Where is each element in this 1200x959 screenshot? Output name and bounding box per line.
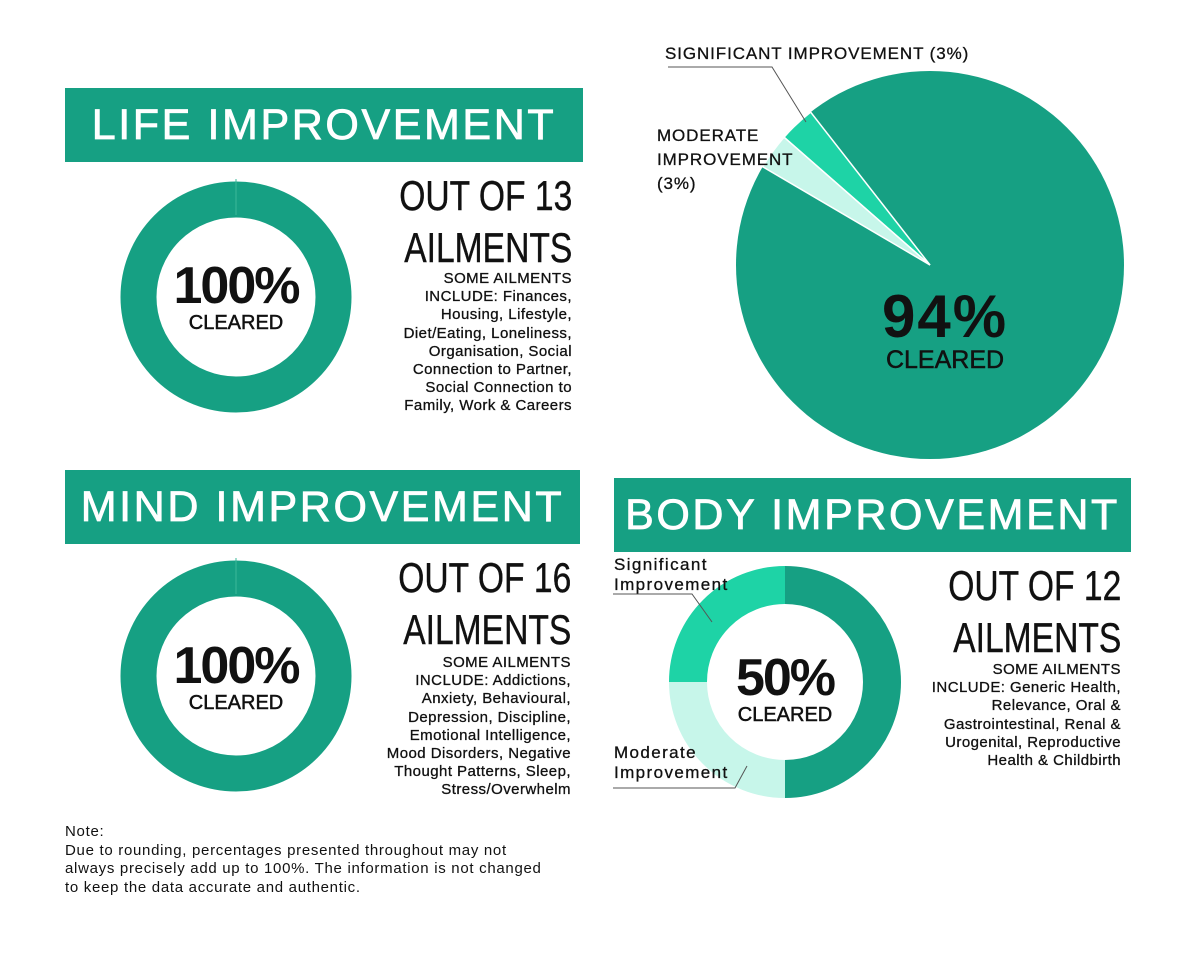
donut label: life: 100% xyxy=(174,257,298,315)
text: life ailments: Diet/Eating, Loneliness, xyxy=(404,325,572,342)
text: life ailments xyxy=(404,270,572,414)
pie label: moderate xyxy=(657,126,793,193)
text: life ailments: Organisation, Social xyxy=(429,343,572,360)
heading: out of 12 ailments: OUT OF 12 xyxy=(948,562,1121,609)
text: body ailments: Urogenital, Reproductive xyxy=(945,734,1121,751)
pie chart: life overall xyxy=(736,71,1124,459)
donut label: mind: CLEARED xyxy=(189,692,283,714)
donut label: mind: 100% xyxy=(174,637,298,695)
text: body ailments xyxy=(932,661,1121,769)
heading: out of 13 ailments xyxy=(399,172,572,271)
note xyxy=(65,823,542,896)
banner: mind improvement: MIND IMPROVEMENT xyxy=(81,483,564,531)
text: body ailments: Gastrointestinal, Renal & xyxy=(944,716,1121,733)
text: life ailments: Social Connection to xyxy=(425,379,572,396)
text: mind ailments: Anxiety, Behavioural, xyxy=(422,690,571,707)
pie center label: 94% cleared: CLEARED xyxy=(886,346,1004,374)
label: significant improvement: Improvement xyxy=(614,575,729,594)
text: life ailments: INCLUDE: Finances, xyxy=(425,288,572,305)
pie label: moderate: IMPROVEMENT xyxy=(657,150,793,169)
pie label: significant: SIGNIFICANT IMPROVEMENT (3%) xyxy=(665,44,969,63)
banner: body improvement xyxy=(614,478,1131,552)
text: mind ailments: Emotional Intelligence, xyxy=(410,727,571,744)
text: mind ailments xyxy=(387,654,571,798)
label: significant improvement: Significant xyxy=(614,555,708,574)
banner: life improvement: LIFE IMPROVEMENT xyxy=(92,101,556,149)
heading: out of 13 ailments: OUT OF 13 xyxy=(399,172,572,219)
text: mind ailments: SOME AILMENTS xyxy=(443,654,571,671)
heading: out of 16 ailments xyxy=(398,554,571,653)
text: life ailments: SOME AILMENTS xyxy=(444,270,572,287)
text: body ailments: Relevance, Oral & xyxy=(992,697,1121,714)
leader lines xyxy=(613,67,806,788)
banner: life improvement xyxy=(65,88,583,162)
text: body ailments: SOME AILMENTS xyxy=(993,661,1121,678)
label: significant improvement xyxy=(614,555,729,594)
text: mind ailments: Stress/Overwhelm xyxy=(441,781,571,798)
note: Due to rounding, percentages presented throughout may not xyxy=(65,842,507,858)
banner: body improvement: BODY IMPROVEMENT xyxy=(625,491,1120,539)
donut: life 100% xyxy=(138,179,334,394)
heading: out of 16 ailments: AILMENTS xyxy=(403,606,571,653)
note: to keep the data accurate and authentic. xyxy=(65,878,361,896)
label: moderate improvement xyxy=(614,743,729,782)
text: mind ailments: Thought Patterns, Sleep, xyxy=(394,763,571,780)
banner: mind improvement xyxy=(65,470,580,544)
text: mind ailments: Mood Disorders, Negative xyxy=(387,745,571,762)
heading: out of 13 ailments: AILMENTS xyxy=(404,224,572,271)
pie center label: 94% cleared: 94% xyxy=(882,283,1008,350)
text: body ailments: Health & Childbirth xyxy=(987,752,1121,769)
donut: body 50% xyxy=(688,585,882,779)
text: life ailments: Family, Work & Careers xyxy=(404,397,572,414)
donut label: body: 50% xyxy=(736,649,834,707)
pie label: moderate: (3%) xyxy=(657,174,696,193)
text: life ailments: Connection to Partner, xyxy=(413,361,572,378)
label: moderate improvement: Moderate xyxy=(614,743,697,762)
label: moderate improvement: Improvement xyxy=(614,763,729,782)
note: Note: xyxy=(65,823,104,840)
text: mind ailments: Depression, Discipline, xyxy=(408,709,571,726)
pie label: moderate: MODERATE xyxy=(657,126,759,145)
donut: mind 100% xyxy=(138,558,334,774)
text: life ailments: Housing, Lifestyle, xyxy=(441,306,572,323)
text: mind ailments: INCLUDE: Addictions, xyxy=(415,672,571,689)
heading: out of 12 ailments xyxy=(948,562,1121,661)
note: always precisely add up to 100%. The information is not changed xyxy=(65,860,542,877)
heading: out of 12 ailments: AILMENTS xyxy=(953,614,1121,661)
donut label: body: CLEARED xyxy=(738,704,832,726)
text: body ailments: INCLUDE: Generic Health, xyxy=(932,679,1121,696)
heading: out of 16 ailments: OUT OF 16 xyxy=(398,554,571,601)
donut label: life: CLEARED xyxy=(189,312,283,334)
